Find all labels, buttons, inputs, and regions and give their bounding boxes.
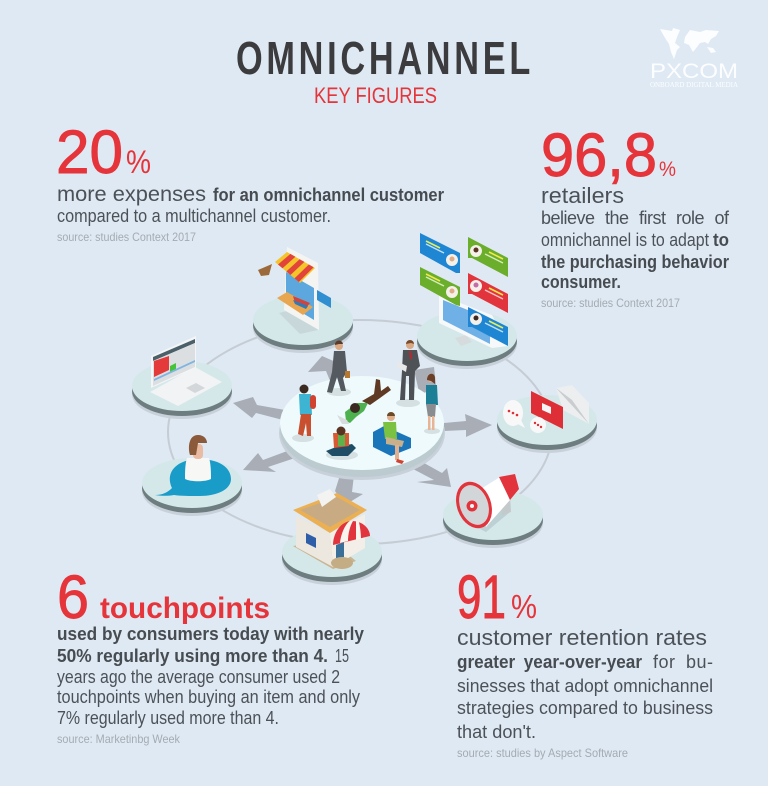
stat: 6 touchpoints: touchpoints [100,592,270,625]
person: boy with backpack [292,384,316,442]
stat: 6 touchpoints [57,563,364,746]
bubble: red review [468,273,508,313]
stat: 6 touchpoints: used by consumers today with nearly [57,624,364,644]
stat: 91% customer retention: sinesses that adopt omnichannel [457,676,713,696]
stat: 91% customer retention: strategies compared to business [457,698,713,718]
stat: 96,8% retailers: the purchasing behavior [541,252,729,272]
stat: 91% customer retention [457,563,713,760]
stat: 96,8% retailers [541,121,730,310]
stat: 6 touchpoints: source: Marketinbg Week [57,732,181,746]
stat: 96,8% retailers: source: studies Context 2017 [541,296,680,310]
stat: 20% more expenses: 20 [56,118,123,186]
icon: support agent speech bubble [155,435,231,496]
arrow: to monitor [414,367,436,396]
stat: 91% customer retention: source: studies by Aspect Software [457,746,628,760]
central platform [279,376,445,480]
bubble: blue review lower [468,307,508,346]
disc: laptop [132,361,232,419]
ring connecting touchpoints [168,320,552,544]
arrow: to laptop [233,397,285,420]
stat: 91% customer retention: that don't. [457,722,536,742]
logo: PXCOM: PXCOM [650,60,738,83]
bubble: blue review [420,233,460,273]
icon: store [293,489,370,569]
person: lying with laptop [337,379,391,424]
logo: PXCOM [650,28,738,89]
person: in blue armchair [373,412,411,464]
stat: 96,8% retailers: omnichannel is to adapt [541,230,709,250]
disc: support agent [142,458,242,516]
stat: 6 touchpoints: 50% regularly using more than 4. [57,646,328,666]
stat: 91% customer retention: 91 [457,563,506,631]
stat: 6 touchpoints: years ago the average consumer used 2 [57,667,340,687]
arrow: to megaphone [413,463,451,487]
person: woman on phone [424,374,440,434]
disc: store [282,527,382,585]
stat: 20% more expenses: source: studies Context 2017 [57,230,196,244]
icon: monitor with review bubbles [420,233,508,348]
stat: 20% more expenses: % [126,144,151,180]
disc: reviews monitor [417,311,517,369]
subtitle: KEY FIGURES [314,83,437,108]
bubble: green review [468,237,508,277]
stat: 96,8% retailers: 96,8 [541,121,657,189]
icon: messages and email [503,385,589,433]
stat: 91% customer retention: customer retention rates [457,625,707,650]
stat: 91% customer retention: % [511,588,537,625]
stat: 91% customer retention: greater year-over-year [457,652,642,672]
stat: 96,8% retailers: % [659,158,676,181]
stat: 20% more expenses: more expenses [57,183,206,206]
stat: 96,8% retailers: believe the first role of [541,208,730,228]
disc: phone store [253,295,353,353]
arrow: to store [335,475,363,505]
stat: 20% more expenses [56,118,444,244]
bubble: green review lower [420,267,460,306]
arrow: to agent [243,450,295,472]
arrow: to messages [444,414,492,437]
stat: 96,8% retailers: to [713,230,729,250]
stat: 6 touchpoints: 7% regularly used more than 4. [57,708,279,728]
icon: laptop [150,336,222,406]
icon: megaphone [450,474,519,533]
stat: 91% customer retention: for bu- [653,652,713,672]
stat: 96,8% retailers: consumer. [541,272,621,292]
stat: 6 touchpoints: 6 [57,563,89,631]
logo: PXCOM: ONBOARD DIGITAL MEDIA [650,81,738,89]
arrow: to phone [308,356,347,388]
person: businessman with tablet [396,340,420,407]
title: OMNICHANNEL [236,32,534,84]
stat: 96,8% retailers: retailers [541,183,624,208]
stat: 6 touchpoints: touchpoints when buying an item and only [57,687,360,707]
stat: 6 touchpoints: 15 [335,646,349,666]
person: sitting on floor [326,426,358,460]
person: businessman walking [327,340,351,396]
stat: 20% more expenses: compared to a multichannel customer. [57,206,331,226]
disc: messages [497,395,597,453]
stat: 20% more expenses: for an omnichannel customer [213,185,444,205]
disc: megaphone [443,490,543,548]
icon: phone shop [258,247,331,334]
